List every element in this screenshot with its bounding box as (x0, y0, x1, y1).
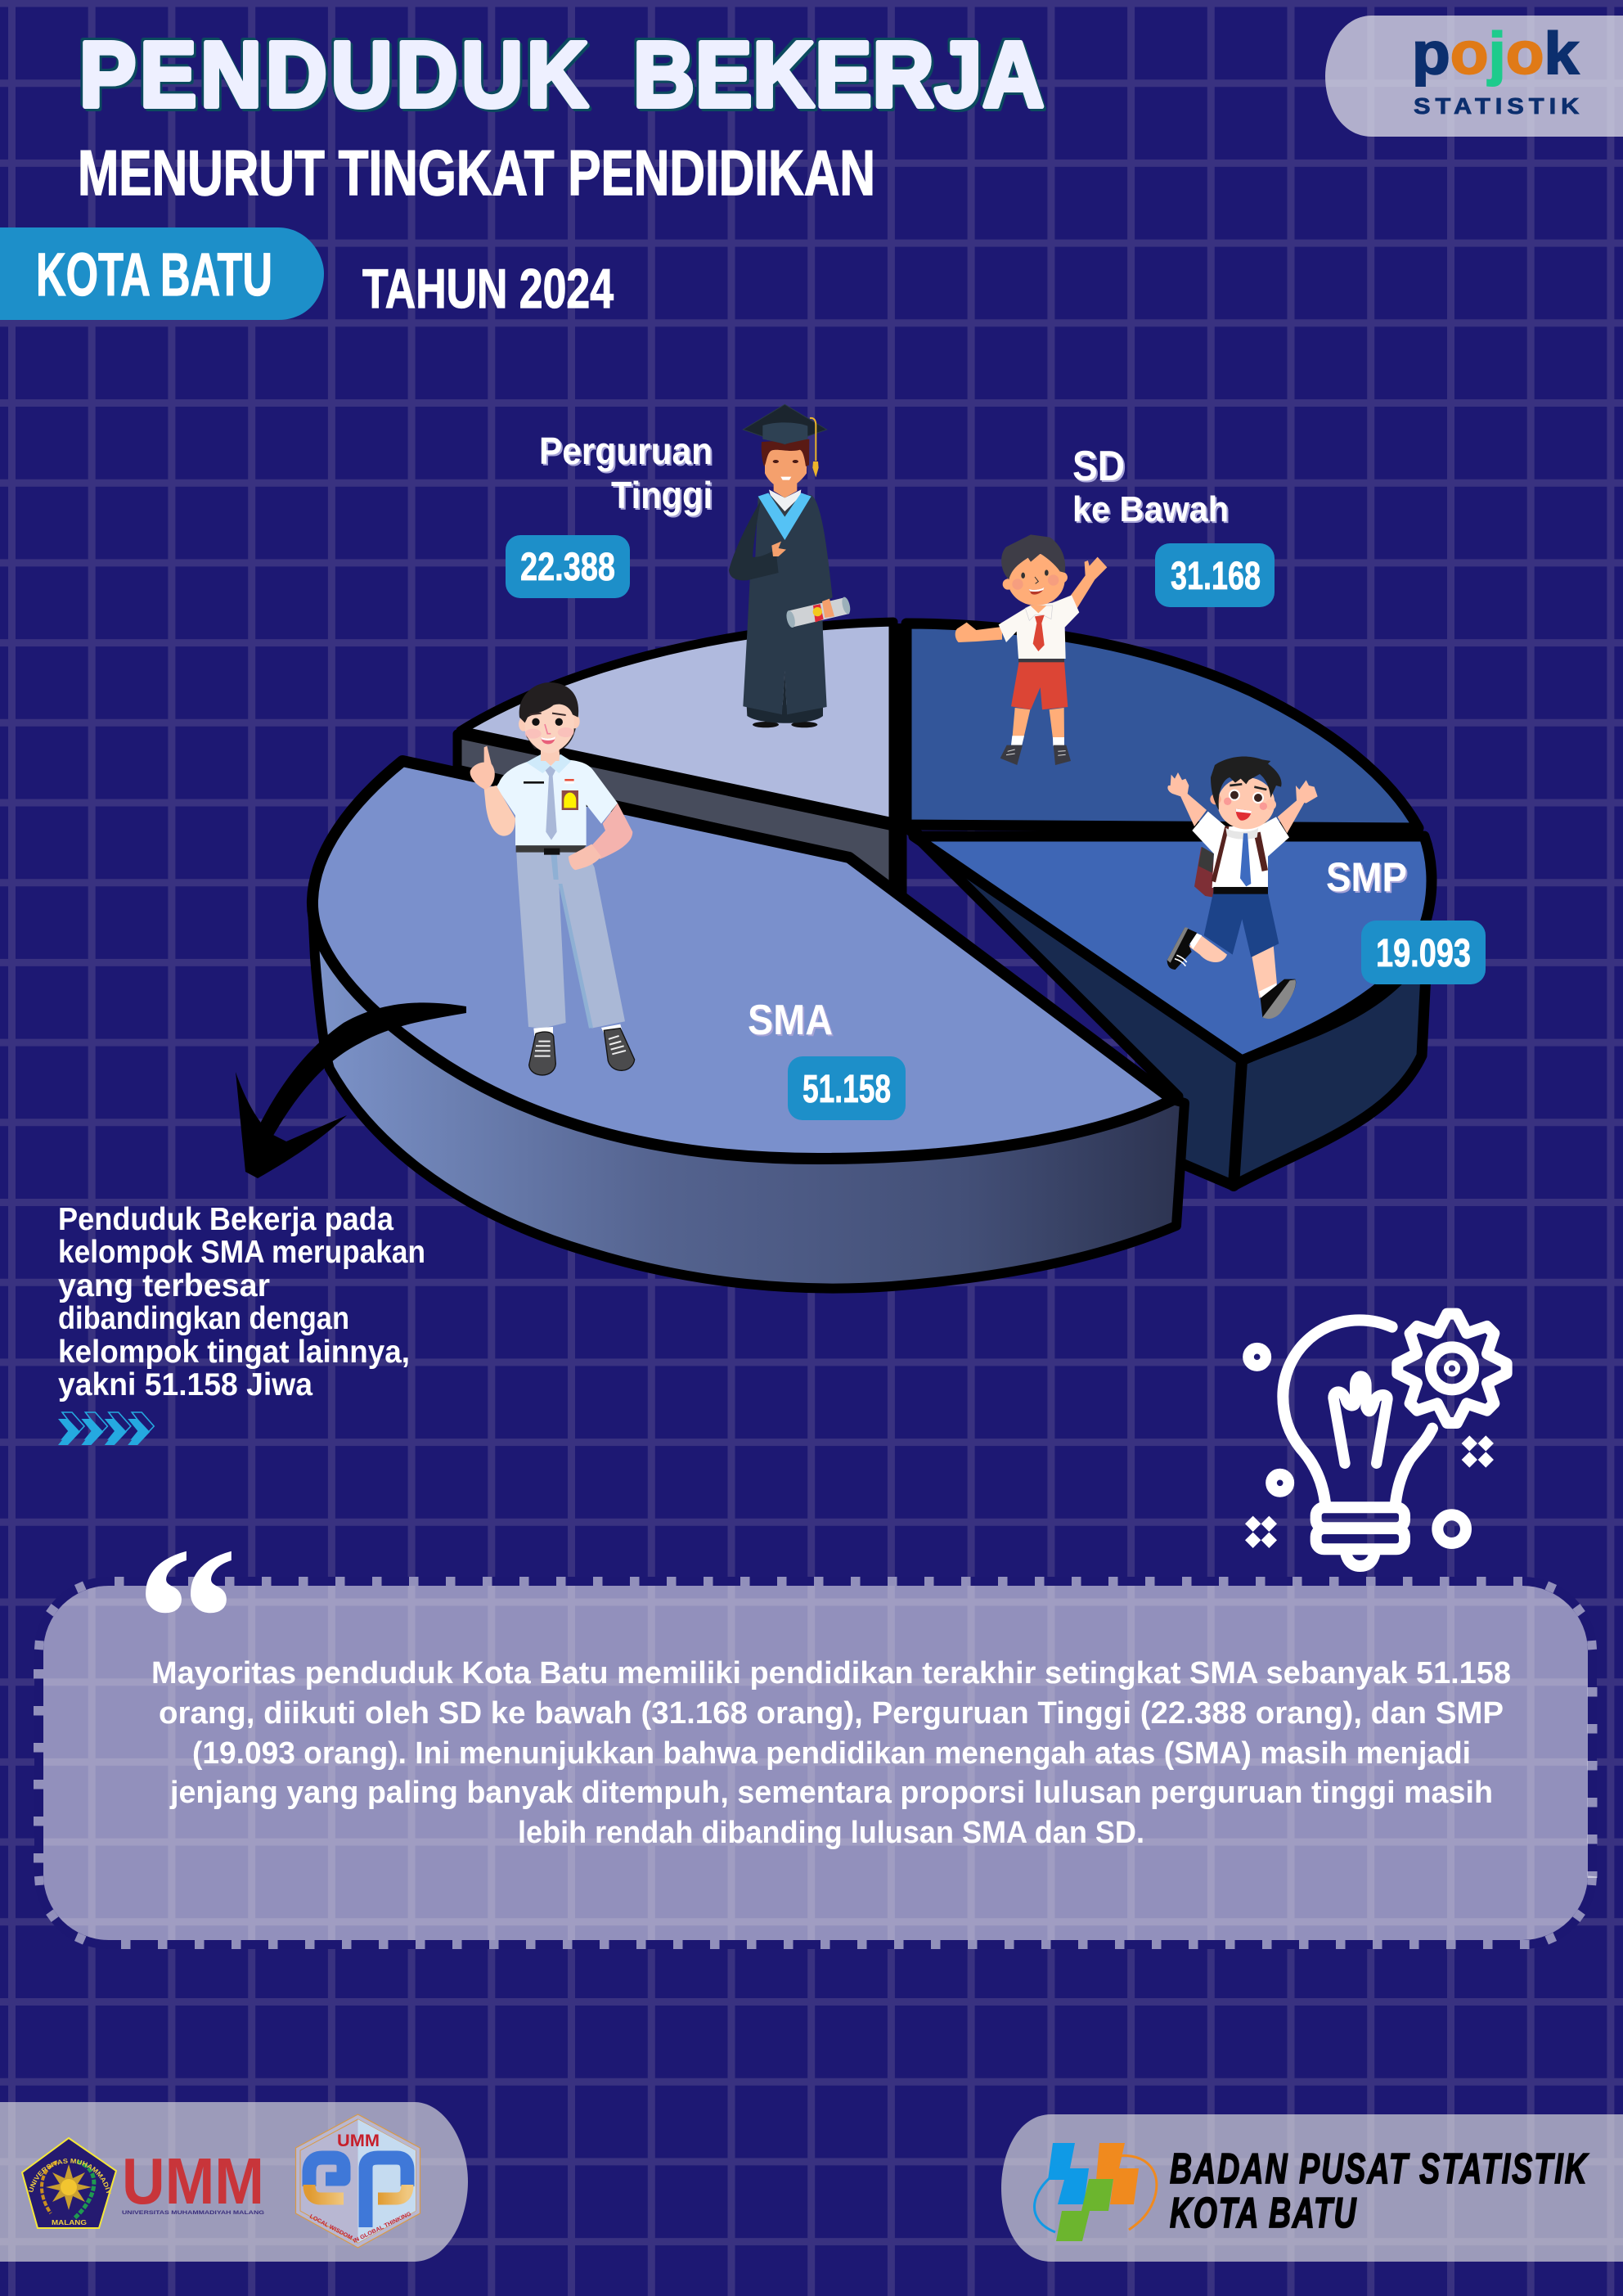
footer pill: BPS (1001, 2114, 1623, 2262)
callout text: yakni 51.158 Jiwa (58, 1367, 312, 1402)
logo: UMM seal: UNIVERSITAS MUHAMMADIYAH (28, 2159, 111, 2194)
label: Perguruan Tinggi (539, 430, 713, 516)
3D pie chart (312, 622, 1432, 1289)
title (79, 24, 1044, 127)
slice side: SMA (312, 908, 1185, 1289)
BPS text: KOTA BATU (1170, 2189, 1357, 2236)
label: Perguruan Tinggi: Perguruan (539, 430, 713, 472)
value: SD ke Bawah: 31.168 (1171, 555, 1261, 598)
slice: Perguruan Tinggi (461, 622, 893, 822)
character: SMA student (470, 682, 635, 1075)
value: SD ke Bawah (1155, 543, 1275, 607)
value: Perguruan Tinggi: 22.388 (520, 546, 615, 589)
summary text: jenjang yang paling banyak ditempuh, sementara proporsi lulusan perguruan tinggi masih (169, 1776, 1493, 1810)
logo: EP hexagon: IN GLOBAL THINKING (353, 2211, 412, 2244)
value: SMA: 51.158 (803, 1068, 891, 1111)
arrow: brush stroke to callout (236, 1002, 466, 1178)
logo: pojok statistik (1325, 16, 1623, 137)
callout text: yang terbesar (58, 1268, 270, 1303)
value: SMP (1361, 921, 1486, 984)
slice side: SMP (906, 826, 1427, 1186)
slice: SMA (312, 761, 1173, 1159)
icon: chevrons (58, 1412, 154, 1445)
character: university graduate (729, 404, 852, 727)
region pill: Kota Batu (0, 227, 324, 320)
callout text (58, 1202, 425, 1402)
BPS text (1170, 2145, 1589, 2236)
label: Perguruan Tinggi: Tinggi (611, 474, 713, 516)
subtitle: MENURUT TINGKAT PENDIDIKAN (78, 137, 875, 209)
logo: EP hexagon: UMM (337, 2132, 380, 2150)
icon: lightbulb and gear (1245, 1314, 1507, 1566)
title: PENDUDUK (79, 24, 588, 127)
slice: SD ke bawah (906, 624, 1418, 828)
value: SMP: 19.093 (1376, 932, 1471, 975)
character: junior high student (1167, 757, 1318, 1019)
logo: pojok statistik: STATISTIK (1414, 93, 1579, 119)
logo: BPS (1034, 2143, 1157, 2241)
year label: TAHUN 2024 (362, 258, 614, 320)
logo: UMM wordmark: UMM (122, 2145, 264, 2217)
callout text: kelompok tingat lainnya, (58, 1335, 410, 1370)
logo: EP hexagon: LOCAL WISDOM (308, 2214, 353, 2241)
label: SMA: SMA (748, 997, 833, 1044)
label: SD ke Bawah (1072, 443, 1229, 529)
label: SD ke Bawah: ke Bawah (1072, 489, 1229, 529)
BPS text: BADAN PUSAT STATISTIK (1170, 2145, 1589, 2192)
logo: pojok statistik: pojok (1412, 21, 1580, 87)
quotation mark: “ (136, 1506, 238, 1732)
title: BEKERJA (633, 24, 1044, 127)
summary text (151, 1656, 1511, 1850)
summary text: lebih rendah dibanding lulusan SMA dan SD. (518, 1816, 1144, 1850)
logo: UMM seal: MALANG (52, 2219, 87, 2226)
character: elementary student (955, 534, 1107, 765)
footer pill: UMM logos (0, 2102, 468, 2262)
summary text: Mayoritas penduduk Kota Batu memiliki pendidikan terakhir setingkat SMA sebanyak 51.158 (151, 1656, 1511, 1690)
callout text: kelompok SMA merupakan (58, 1235, 425, 1270)
logo: EP hexagon (296, 2114, 420, 2248)
logo: UMM seal (21, 2137, 118, 2229)
value: SMA (788, 1056, 906, 1120)
callout text: dibandingkan dengan (58, 1301, 349, 1336)
slice: SMP (914, 836, 1432, 1060)
region pill: Kota Batu: KOTA BATU (36, 241, 272, 308)
callout text: Penduduk Bekerja pada (58, 1202, 393, 1237)
summary text: (19.093 orang). Ini menunjukkan bahwa pendidikan menengah atas (SMA) masih menjadi (192, 1736, 1471, 1771)
label: SMP: SMP (1326, 854, 1407, 900)
panel: summary (34, 1581, 1597, 1944)
slice side: Perguruan Tinggi (457, 734, 893, 892)
value: Perguruan Tinggi (506, 535, 630, 598)
logo: UMM wordmark: UNIVERSITAS MUHAMMADIYAH MALANG (122, 2210, 264, 2216)
summary text: orang, diikuti oleh SD ke bawah (31.168 orang), Perguruan Tinggi (22.388 orang), dan SMP (159, 1696, 1504, 1731)
label: SD ke Bawah: SD (1072, 443, 1125, 490)
